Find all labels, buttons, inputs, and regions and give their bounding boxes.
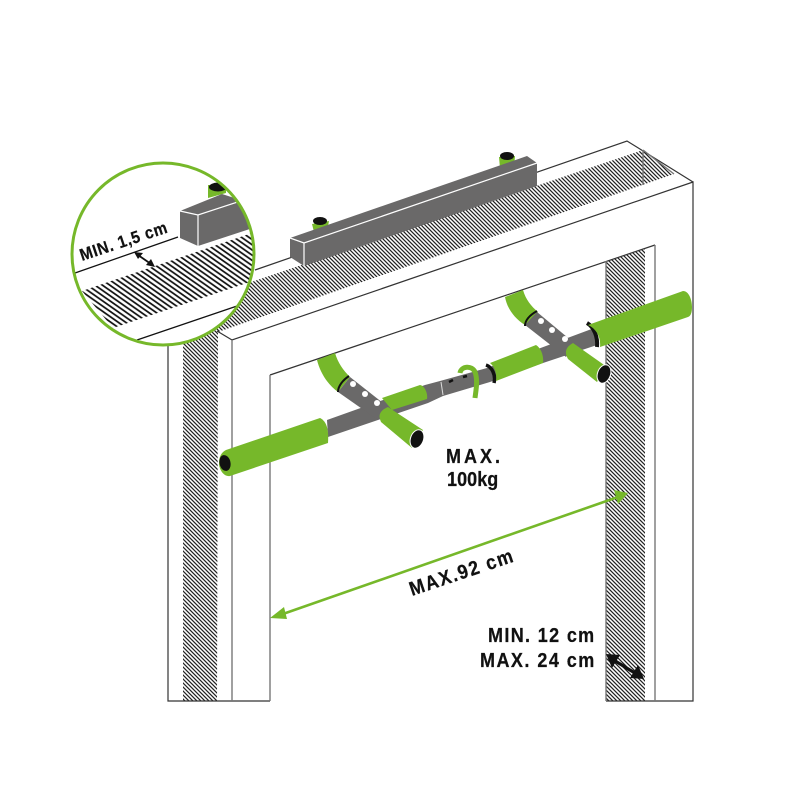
circle ring [72,163,254,345]
label: max load: MAX. [446,446,500,468]
inner foam left [382,385,427,410]
magnified door detail [75,182,262,340]
arrow: max span [270,490,628,619]
bar joint [441,382,443,395]
top hatched band [183,150,674,332]
label: max load: 100kg [447,469,498,491]
box bracket on door top [290,152,537,266]
label: max load [446,446,500,491]
right cross arm [525,311,613,385]
label: min thickness: MIN. 1,5 cm [77,218,170,265]
pull-up bar [218,290,692,476]
label: max span: MAX.92 cm [407,546,516,601]
magnified hatching [82,233,262,328]
door frame [168,141,693,701]
magnified box [180,194,249,246]
inner foam right [486,345,543,383]
left cross arm curve [317,353,350,392]
left cross arm [338,376,426,450]
label: door thickness: MAX. 24 cm [480,650,594,672]
left grip foam [218,418,328,476]
arrow: min gap [134,252,155,267]
box body [290,156,537,266]
label: door thickness [480,625,594,672]
grey bar [327,327,597,437]
green rotate hook [460,367,477,398]
frame outlines [168,141,693,701]
right cross arm curve [505,290,538,325]
magnified knob [208,182,227,198]
label: door thickness: MIN. 12 cm [488,625,594,647]
right hatched jamb [606,248,645,701]
magnified door lines [75,237,240,340]
knob: right [499,152,515,168]
arrow: door thickness [606,654,644,679]
left hatched jamb [183,305,218,701]
bar pin holes [449,376,467,382]
knob: left [312,217,329,232]
magnifier circle [72,163,262,345]
right grip foam [587,291,692,347]
